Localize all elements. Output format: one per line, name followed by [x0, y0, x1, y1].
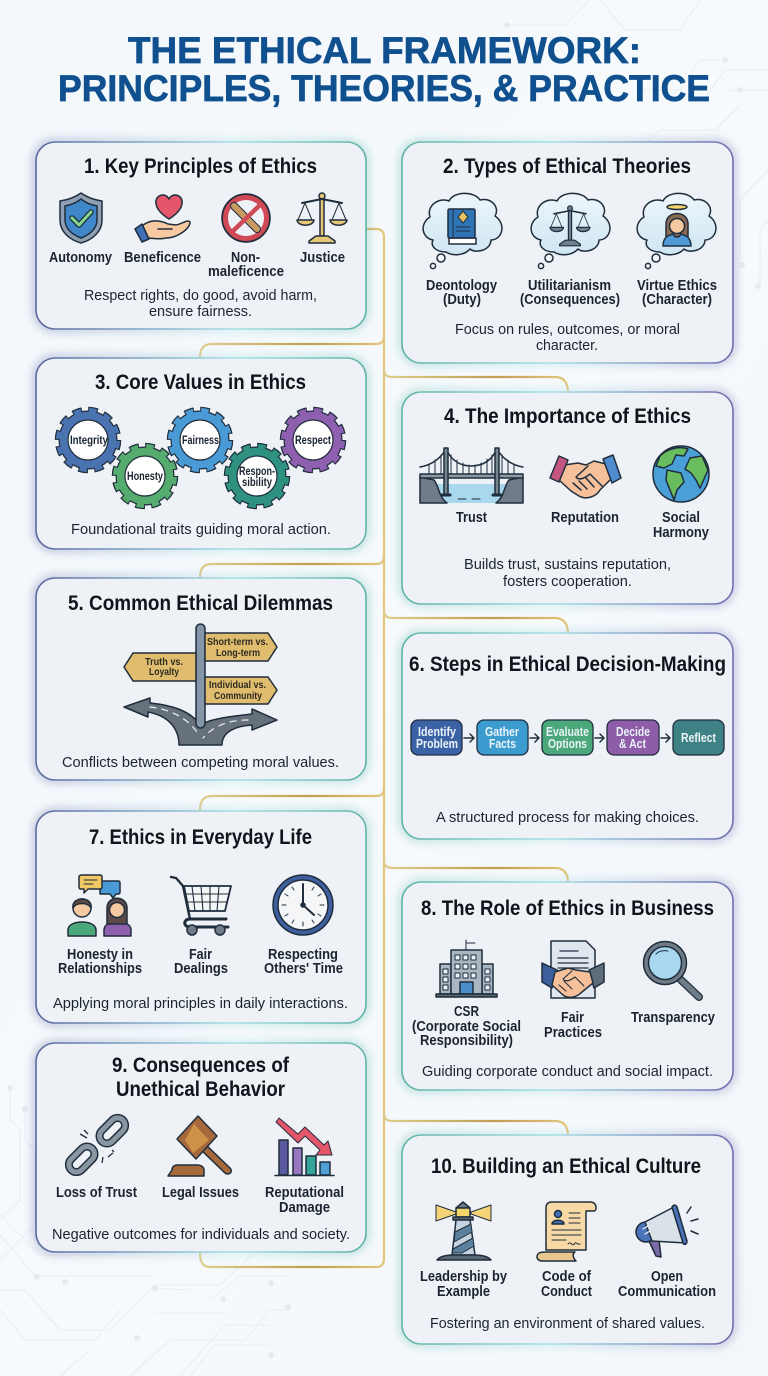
sign labels: Long-term: [216, 647, 260, 659]
labels: Leadership by: [420, 1269, 507, 1285]
labels: (Duty): [443, 292, 481, 308]
icon: justice scales: [297, 193, 347, 243]
icon: contract and handshake: [542, 941, 604, 998]
labels: Autonomy: [49, 250, 112, 266]
icon: signpost: [124, 624, 277, 728]
panel: 10. Building an Ethical Culture: [402, 1135, 733, 1344]
labels: (Corporate Social: [412, 1019, 521, 1035]
heading 9: Unethical Behavior: [116, 1077, 286, 1101]
description: Fostering an environment of shared values.: [430, 1315, 705, 1332]
heading 7: 7. Ethics in Everyday Life: [89, 825, 312, 849]
labels: Transparency: [631, 1010, 715, 1026]
icon: forked road: [124, 698, 277, 745]
labels: Example: [437, 1284, 490, 1300]
icon: megaphone: [636, 1205, 698, 1257]
step: Reflect: Reflect: [681, 731, 717, 745]
labels: [426, 278, 717, 308]
icon: thought cloud with scales: [531, 193, 610, 269]
description: A structured process for making choices.: [436, 809, 699, 826]
labels: Trust: [456, 510, 487, 526]
gear labels: Respon-: [239, 466, 275, 478]
icon: handshake: [550, 455, 621, 498]
step: Evaluate Options: Evaluate: [546, 725, 589, 739]
labels: Social: [662, 510, 700, 526]
labels: Deontology: [426, 278, 497, 294]
step: Evaluate Options: Options: [548, 737, 587, 751]
sign labels: Short-term vs.: [207, 636, 268, 648]
panel: 9. Consequences of Unethical Behavior: [36, 1043, 366, 1252]
labels: Damage: [279, 1200, 330, 1216]
labels: (Consequences): [520, 292, 620, 308]
sign labels: Individual vs.: [209, 679, 266, 691]
icon: globe: [653, 446, 709, 502]
panel: 7. Ethics in Everyday Life: [36, 811, 366, 1023]
description: Negative outcomes for individuals and society.: [52, 1226, 350, 1243]
sign labels: [145, 636, 268, 702]
sign labels: Community: [214, 690, 262, 702]
panel: 1. Key Principles of Ethics: [36, 142, 366, 329]
icon: broken chain: [66, 1115, 128, 1175]
labels: Reputational: [265, 1185, 344, 1201]
title: THE ETHICAL FRAMEWORK:: [128, 30, 641, 71]
heading 2: 2. Types of Ethical Theories: [443, 154, 691, 178]
labels: maleficence: [208, 264, 284, 280]
description: [84, 287, 317, 320]
title: PRINCIPLES, THEORIES, & PRACTICE: [58, 68, 710, 109]
icon: thought cloud with book: [423, 193, 502, 269]
panel: 5. Common Ethical Dilemmas: [36, 578, 366, 780]
gear labels: Fairness: [182, 435, 219, 447]
labels: Conduct: [541, 1284, 592, 1300]
description: ensure fairness.: [149, 303, 252, 320]
description: character.: [536, 337, 598, 354]
labels: Practices: [544, 1025, 602, 1041]
description: Respect rights, do good, avoid harm,: [84, 287, 317, 304]
gold connector lines: [200, 229, 568, 1267]
description: Builds trust, sustains reputation,: [464, 556, 671, 573]
step: Reflect: [673, 720, 724, 755]
labels: Code of: [542, 1269, 591, 1285]
step: Identify Problem: Identify: [418, 725, 456, 739]
icon: office building: [436, 940, 497, 997]
labels: Justice: [300, 250, 345, 266]
labels: Loss of Trust: [56, 1185, 137, 1201]
icon: thought cloud with virtuous person: [637, 193, 716, 269]
heading 1: 1. Key Principles of Ethics: [84, 154, 317, 178]
labels: CSR: [454, 1004, 479, 1020]
step: Identify Problem: [411, 720, 462, 755]
labels: Utilitarianism: [528, 278, 611, 294]
panel: 2. Types of Ethical Theories: [402, 142, 733, 363]
arrows between steps: [464, 734, 670, 742]
heading 9: [112, 1053, 290, 1101]
heading 6: 6. Steps in Ethical Decision-Making: [409, 652, 726, 676]
step: Identify Problem: Problem: [416, 737, 458, 751]
description: [455, 321, 680, 354]
icon: gear Fairness: [171, 411, 229, 469]
labels: (Character): [642, 292, 712, 308]
icon: shield: [60, 193, 102, 243]
labels: Legal Issues: [162, 1185, 239, 1201]
description: Conflicts between competing moral values.: [62, 754, 339, 771]
labels: Dealings: [174, 961, 228, 977]
sign labels: Truth vs.: [145, 656, 183, 668]
description: Focus on rules, outcomes, or moral: [455, 321, 680, 338]
icon: code of conduct scroll: [537, 1202, 596, 1261]
heading 8: 8. The Role of Ethics in Business: [421, 896, 714, 920]
step: Decide & Act: & Act: [619, 737, 647, 751]
icon: wall clock: [273, 875, 333, 935]
gear labels: [70, 435, 331, 489]
gear labels: sibility: [242, 477, 272, 489]
labels: Relationships: [58, 961, 142, 977]
icon: lighthouse: [436, 1202, 491, 1260]
labels: Honesty in: [67, 947, 133, 963]
step: Gather Facts: [477, 720, 528, 755]
icon: gear Respect: [284, 411, 342, 469]
icon: gear Integrity: [59, 411, 117, 469]
icon: gear Responsibility: [228, 447, 286, 505]
panel: 4. The Importance of Ethics: [402, 392, 733, 604]
icon: gavel: [168, 1116, 231, 1176]
labels: Respecting: [268, 947, 338, 963]
step: Gather Facts: Gather: [485, 725, 519, 739]
description: fosters cooperation.: [503, 573, 632, 590]
labels: [49, 250, 345, 280]
labels: Communication: [618, 1284, 716, 1300]
icon: shopping cart: [171, 877, 231, 935]
panel: 6. Steps in Ethical Decision-Making: [402, 633, 733, 839]
labels: [58, 947, 343, 977]
sign labels: Loyalty: [149, 666, 179, 678]
labels: Responsibility): [420, 1033, 513, 1049]
labels: Virtue Ethics: [637, 278, 717, 294]
labels: [420, 1269, 716, 1300]
labels: Non-: [231, 250, 260, 266]
description: [464, 556, 671, 590]
icon: two people talking: [68, 875, 131, 936]
heading 10: 10. Building an Ethical Culture: [431, 1154, 701, 1178]
step: Decide & Act: [607, 720, 659, 755]
labels: Reputation: [551, 510, 619, 526]
heading 5: 5. Common Ethical Dilemmas: [68, 591, 333, 615]
labels: Others' Time: [264, 961, 343, 977]
description: Guiding corporate conduct and social impact.: [422, 1063, 713, 1080]
labels: [56, 1185, 344, 1216]
labels: Beneficence: [124, 250, 201, 266]
description: Foundational traits guiding moral action.: [71, 521, 331, 538]
icon: declining bar chart: [275, 1118, 334, 1176]
panel: 3. Core Values in Ethics: [36, 358, 366, 549]
step: Decide & Act: Decide: [616, 725, 650, 739]
labels: [412, 1004, 715, 1049]
labels: Open: [651, 1269, 683, 1285]
labels: Harmony: [653, 525, 709, 541]
icon: no harm sign: [222, 194, 270, 242]
heading 3: 3. Core Values in Ethics: [95, 370, 306, 394]
step: Evaluate Options: [542, 720, 593, 755]
icon: gear Honesty: [116, 447, 174, 505]
step: Gather Facts: Facts: [489, 737, 516, 751]
heading 9: 9. Consequences of: [112, 1053, 290, 1077]
title: [58, 30, 710, 109]
gear labels: Respect: [295, 435, 331, 447]
icon: hand with heart: [135, 195, 190, 242]
description: Applying moral principles in daily interactions.: [53, 995, 348, 1012]
icon: magnifying glass: [644, 942, 699, 997]
icon: suspension bridge: [420, 448, 523, 503]
gear labels: Honesty: [127, 471, 163, 483]
panel: 8. The Role of Ethics in Business: [402, 882, 733, 1090]
labels: [456, 510, 709, 541]
heading 4: 4. The Importance of Ethics: [444, 404, 691, 428]
labels: Fair: [561, 1010, 584, 1026]
labels: Fair: [189, 947, 212, 963]
gear labels: Integrity: [70, 435, 108, 447]
